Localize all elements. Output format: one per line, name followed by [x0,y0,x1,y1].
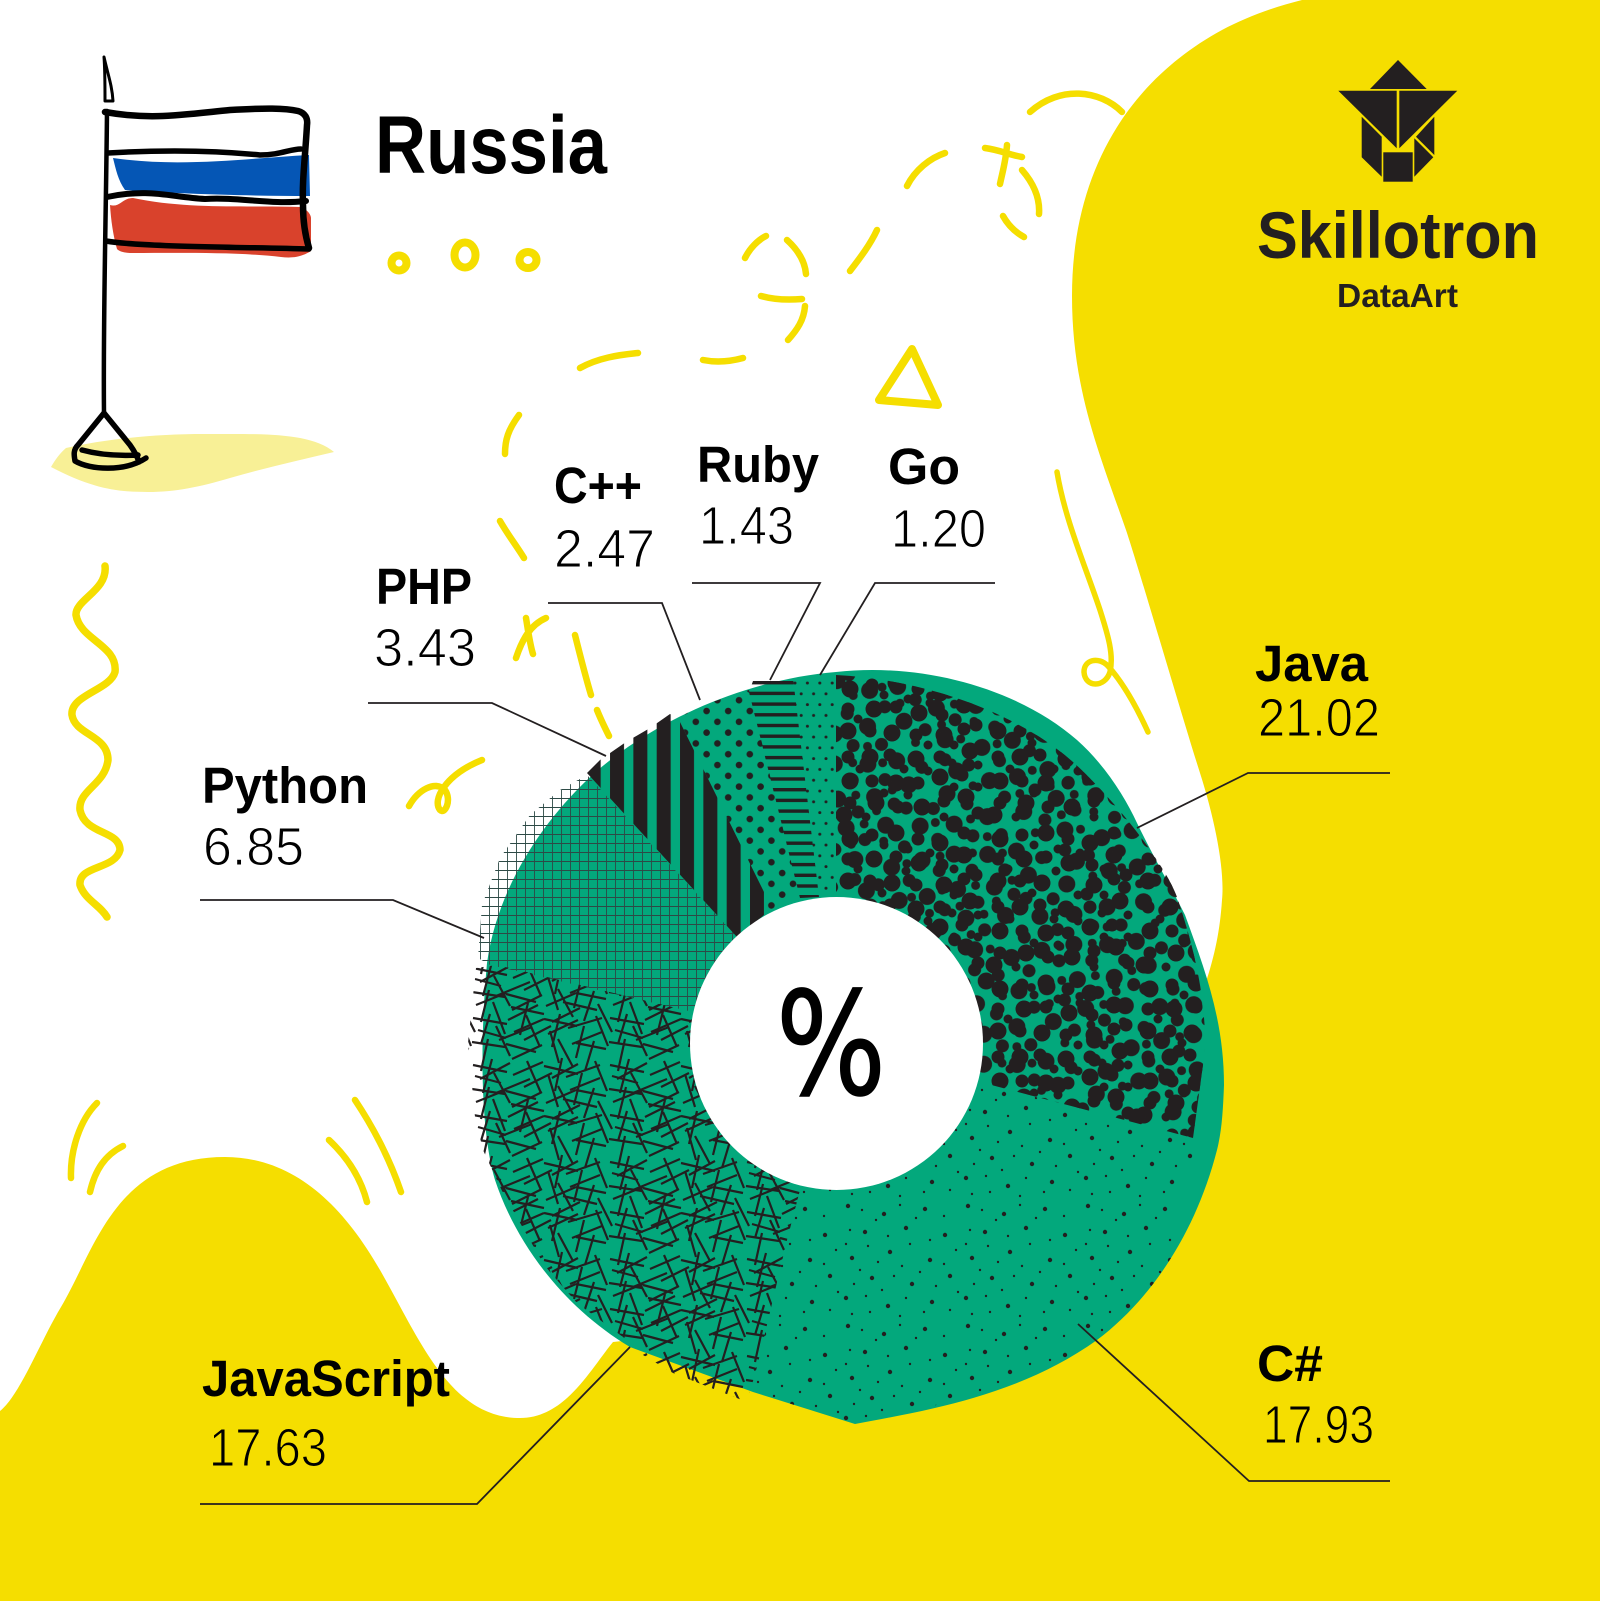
label: Ruby: Ruby [697,436,820,493]
label: Java [1255,635,1380,748]
donut hole [690,897,983,1190]
slice: Python [478,775,737,1012]
decorative yellow doodles [71,94,1148,1202]
leader lines [200,583,1390,1504]
flag illustration [51,57,334,492]
donut chart [468,670,1224,1424]
label: C++ [554,457,655,579]
logo emblem [1338,60,1457,182]
label: Java: 21.02 [1258,688,1380,748]
label: PHP: PHP [376,558,472,615]
slice: Ruby [749,678,819,898]
label: JavaScript: JavaScript [202,1350,450,1407]
logo wordmark: Skillotron [1257,198,1539,272]
label: Java: Java [1255,635,1369,692]
title: Russia [375,100,608,191]
label: JavaScript: 17.63 [209,1418,327,1478]
slice: PHP [587,714,764,937]
label: C#: 17.93 [1263,1395,1374,1455]
label: C++: C++ [554,457,642,514]
logo subtitle: DataArt [1337,277,1458,314]
label: Python: 6.85 [203,817,304,877]
donut base [482,670,1224,1424]
label: Go: 1.20 [891,499,986,559]
label: C#: C# [1257,1335,1323,1392]
label: PHP: 3.43 [374,618,476,678]
slice: C++ [678,690,800,912]
label: Go [888,438,986,559]
label: C# [1257,1335,1374,1455]
slice: Java [836,675,1205,1138]
label: Go: Go [888,438,960,495]
logo: Skillotron DataArt [1257,60,1539,272]
slice: JavaScript [468,965,800,1402]
label: C++: 2.47 [554,519,655,579]
label: PHP [374,558,476,678]
percent sign: % [776,961,886,1128]
label: Python [202,757,368,877]
slice: C# [756,1088,1192,1420]
label: JavaScript [202,1350,450,1478]
label: Python: Python [202,757,368,814]
slice: Go [792,675,836,897]
label: Ruby: 1.43 [699,496,794,556]
label: Ruby [697,436,820,556]
